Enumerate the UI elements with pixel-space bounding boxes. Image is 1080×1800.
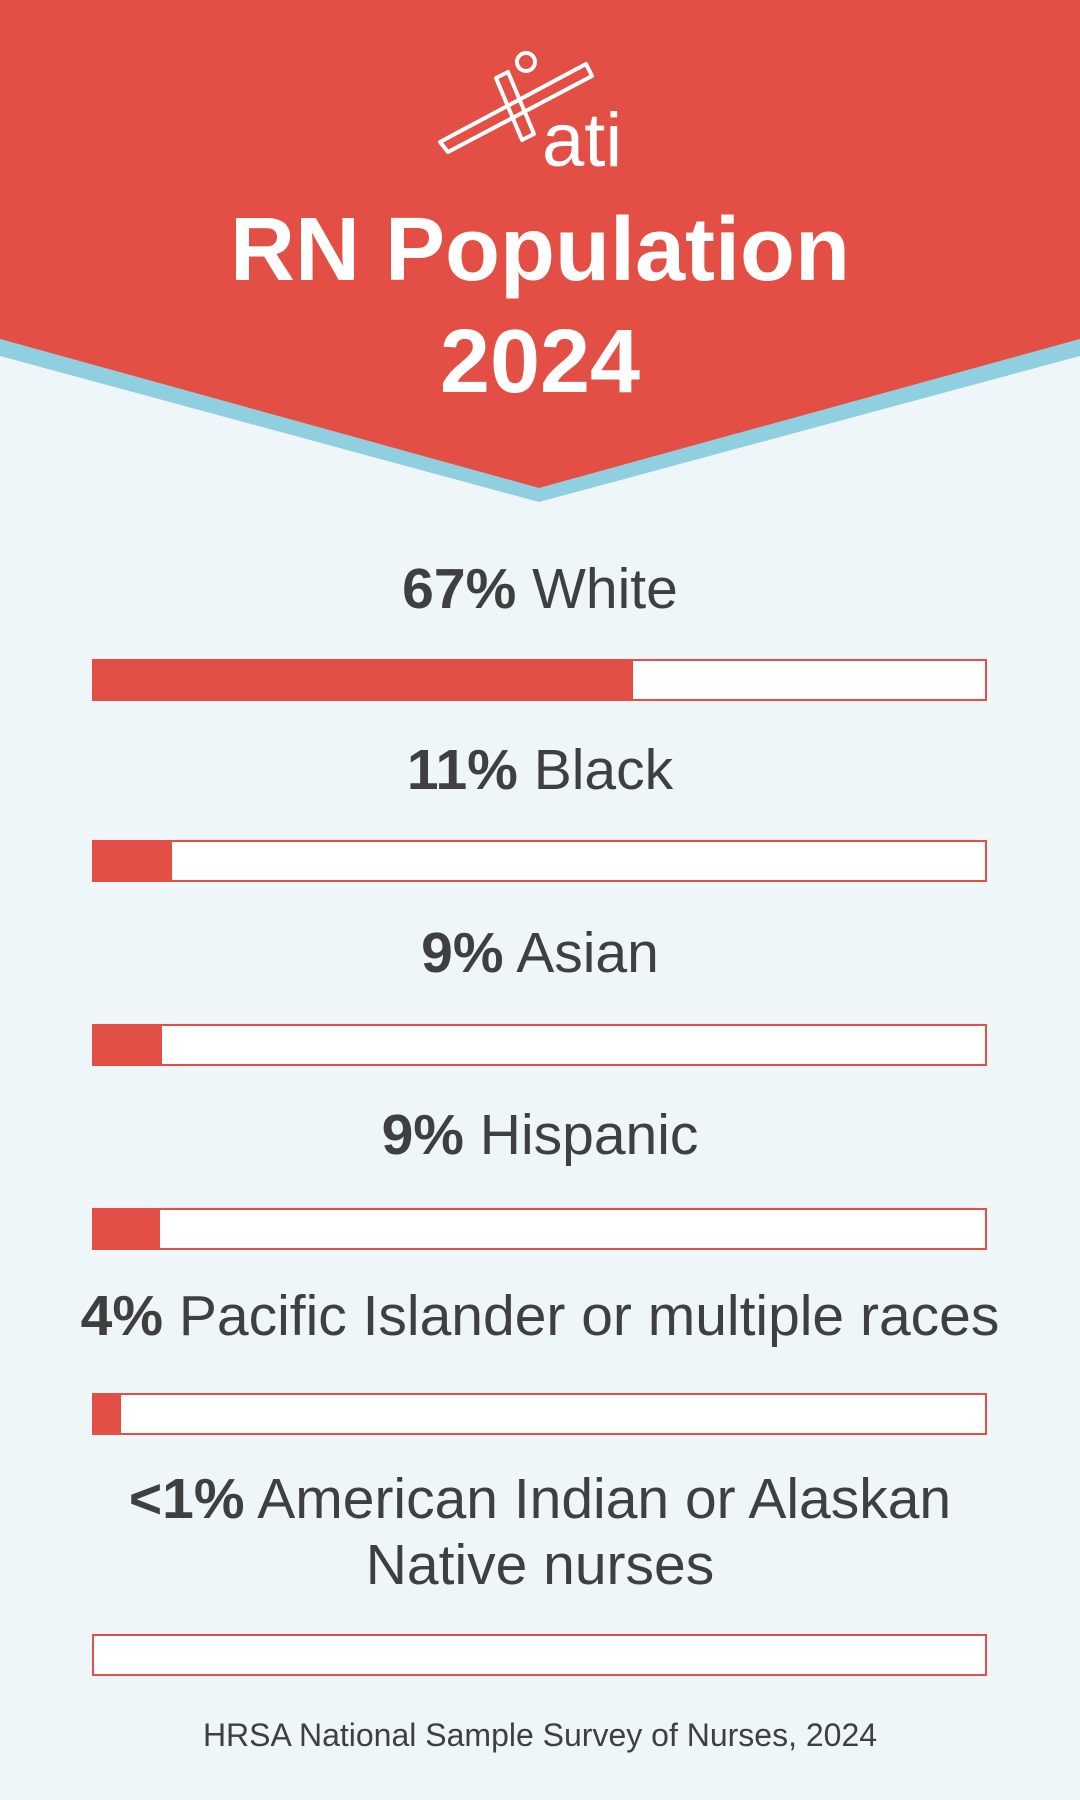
title xyxy=(230,200,850,412)
bar: black xyxy=(92,840,987,882)
label: white: 67% White xyxy=(402,557,678,621)
label: american indian xyxy=(129,1467,951,1597)
label: pacific: 4% Pacific Islander or multiple races xyxy=(81,1284,999,1348)
label: american indian: Native nurses xyxy=(366,1533,714,1597)
title: 2024 xyxy=(440,312,640,412)
logo xyxy=(438,51,622,170)
bar: american indian xyxy=(92,1634,987,1676)
bar: hispanic xyxy=(92,1208,987,1250)
label: asian: 9% Asian xyxy=(421,921,659,985)
label: hispanic: 9% Hispanic xyxy=(382,1103,698,1167)
label: black: 11% Black xyxy=(407,738,673,802)
bar: asian xyxy=(92,1024,987,1066)
title: RN Population xyxy=(230,200,850,300)
bar: pacific xyxy=(92,1393,987,1435)
footer source: HRSA National Sample Survey of Nurses, 2024 xyxy=(203,1717,877,1753)
header banner xyxy=(0,0,1080,502)
label: american indian: <1% American Indian or Alaskan xyxy=(129,1467,951,1531)
bar: white xyxy=(92,659,987,701)
